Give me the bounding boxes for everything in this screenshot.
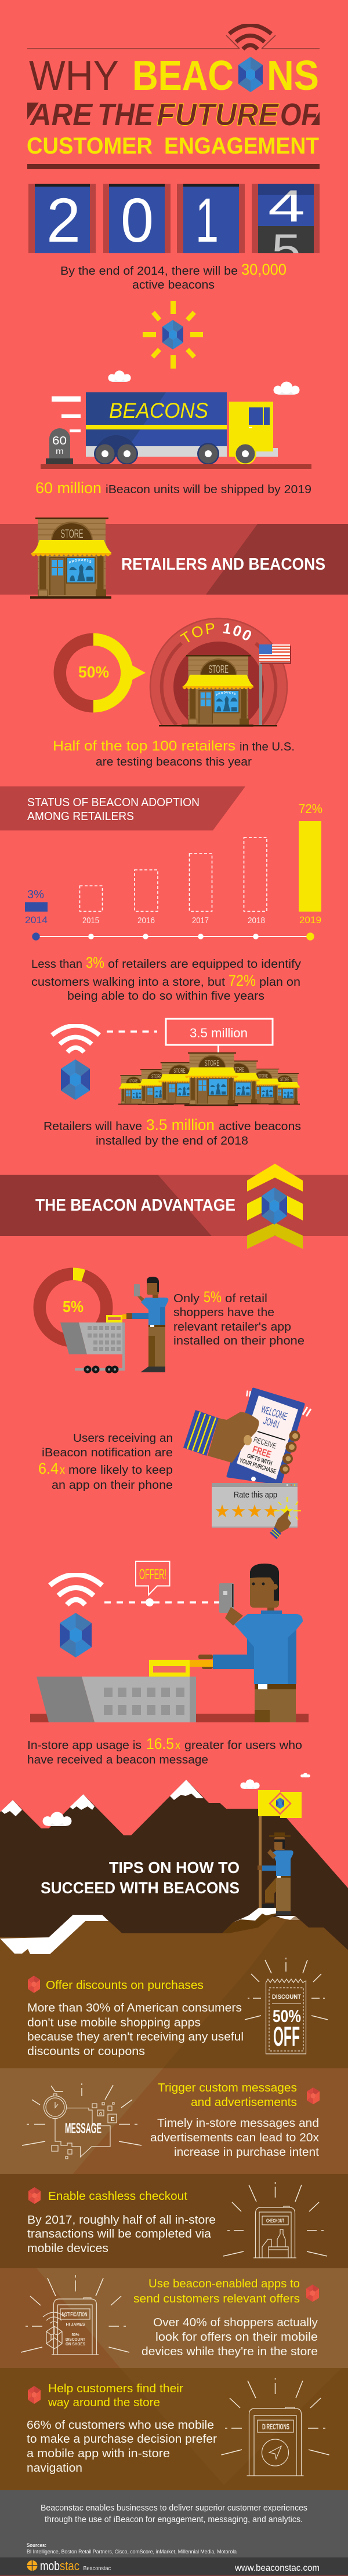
footer: about beaconstac and sources [0,2490,348,2557]
text: 30,000 active beacons: By the end of 2014, there will be [60,265,238,278]
bar: 2019: 72% [299,801,322,816]
text: only 5% of retail shoppers: relevant retailer's app [173,1321,291,1333]
panel: tip 2 messages [0,2068,348,2174]
text: about beaconstac [41,2503,307,2524]
icon: american flag [259,644,291,725]
callout: 3.5 million: 3.5 million [190,1026,248,1040]
panel: status of beacon adoption heading: STATUS OF BEACON ADOPTION [27,796,200,809]
logo: mobstac: stac [60,2559,79,2573]
panel: tip 1 discounts [27,1958,328,2058]
text: less than 3%: being able to do so within five years [67,990,264,1003]
text: less than 3%: customers walking into a store, but [31,976,225,989]
text: tip 5 body: a mobile app with in-store [27,2447,170,2460]
text: less than 3%: of retailers are equipped to identify [108,958,301,971]
title line: why beacons [29,53,319,99]
text: half of the top 100 retailers: are testing beacons this year [96,756,252,768]
icon: group of stores [118,1052,300,1106]
text: tip 4 body: devices while they're in the store [142,2345,318,2358]
text: sources: Sources: [27,2542,46,2549]
icon: cart [30,1660,309,1722]
heading: trigger custom messages [158,2082,297,2109]
text: half of the top 100 retailers: in the U.S. [240,741,295,753]
text: 60 million shipped [35,479,311,497]
year flip counter 2014: 0 [121,185,154,255]
title line: are the future of: FUTURE [157,97,280,132]
illustration: mountains with flag and climber [0,1773,348,2068]
chart: 50% donut [60,639,146,706]
panel: retailers and beacons banner [0,518,348,599]
text: 3.5 million active beacons: 3.5 million [146,1116,215,1134]
text: less than 3%: 72% [229,972,256,989]
panel: rate this app [212,1483,301,1539]
icon: phone notification: NOTIFICATION [61,2312,87,2318]
panel: rate this app: Rate this app [234,1490,277,1500]
text: users receiving an ibeacon notification: iBeacon notification are [42,1447,173,1459]
icon: phone directions [222,2378,329,2476]
title line: why beacons: WHY [29,53,119,99]
icon: phone checkout [223,2182,327,2258]
heading: help customers find their way: Help customers find their [48,2382,183,2395]
title line: customer engagement: CUSTOMER [27,133,153,159]
icon: message bubble and stopwatch: E [111,2116,115,2123]
timeline [32,932,314,941]
illustration: phone with welcome message: JOHN [262,1415,281,1431]
heading: retailers and beacons: RETAILERS AND BEACONS [121,555,325,574]
icon: red beacon [307,2087,320,2104]
text: less than 3%: Less than [31,958,82,971]
bar chart: beacon adoption by year: 2015 [82,916,99,926]
icon: 60 m milestone: 60 [52,435,67,447]
illustration: beacon delivery truck: BEACONS [109,399,208,422]
title line: are the future of: OF [280,97,319,132]
icon: red beacon [28,1976,40,1993]
icon: discount coupon [245,1958,328,2054]
icon: store [182,655,253,727]
icon: rating stars [216,1497,301,1520]
icon: snow caps [1,1780,204,1816]
text: in-store app usage: In-store app usage is [27,1739,142,1752]
icon: 60 m milestone [46,428,73,464]
bar: 2019: 2019 [299,914,321,926]
callout: 3.5 million [166,1019,273,1053]
icon: chevrons with beacon [247,1164,303,1249]
icon: store: PRODUCTS [68,559,92,564]
illustration: beacon delivery truck [41,370,311,469]
icon: shopping cart [60,1314,132,1373]
text: about beaconstac: Beaconstac enables businesses to deliver superior customer experiences [41,2503,307,2513]
text: 30,000 active beacons: active beacons [132,279,215,292]
text: sources: BI Intelligence, Boston Retail Partners, Cisco, comScore, inMarket, Millennial Media, Motorola [27,2549,237,2555]
text: website: www.beaconstac.com [234,2563,320,2573]
year flip counter 2014: 2 [46,185,81,255]
text: 60 million shipped: 60 million [35,479,102,497]
icon: title wifi signal [27,25,320,49]
icon: phone notification: HI JAMES [66,2322,85,2327]
icon: group of stores: STORE [151,1073,161,1079]
text: tip 2 body: increase in purchase intent [174,2146,319,2159]
text: only 5% of retail shoppers: of retail [225,1292,267,1305]
text: 3.5 million active beacons: installed by the end of 2018 [96,1135,248,1147]
text: tip 1 body: don't use mobile shopping apps [27,2017,201,2030]
text: tip 3 body: transactions will be completed via [27,2228,212,2240]
heading: help customers find their way [48,2382,183,2409]
bar: 2014: 2014 [25,914,48,926]
title line: are the future of [27,97,320,132]
callout: offer: OFFER! [139,1566,166,1583]
text: in-store app usage: have received a beacon message [27,1754,208,1766]
icon: phone notification: 50% [72,2332,79,2337]
text: tip 2 body: advertisements can lead to 20x [150,2132,319,2144]
icon: red beacon [306,2284,319,2302]
title line: why beacons: BEAC [132,53,234,99]
heading: trigger custom messages: and advertisements [191,2096,297,2109]
icon: message bubble and stopwatch [22,2083,142,2159]
icon: group of stores: STORE [258,1073,268,1079]
text: less than 3% [31,954,301,1003]
text: tip 2 body: Timely in-store messages and [157,2117,319,2130]
text: less than 3%: 3% [86,954,104,971]
icon: group of stores: STORE [280,1077,289,1083]
panel: tip 5 store navigation [0,2368,348,2490]
text: tip 3 body: mobile devices [27,2242,108,2255]
bar chart: beacon adoption by year: 2016 [137,916,155,926]
year flip counter 2014 [28,184,320,253]
heading: trigger custom messages: Trigger custom messages [158,2082,297,2094]
heading: use beacon-enabled apps: send customers relevant offers [133,2293,300,2305]
illustration: phone with welcome message: RECEIVE [253,1435,277,1451]
text: tip 4 body: look for offers on their mobile [155,2331,318,2344]
panel: status of beacon adoption heading [0,786,245,830]
footer: logo bar [0,2557,348,2576]
icon: red beacon [28,2386,41,2404]
icon: man with phone [126,1277,168,1372]
icon: red beacon [28,2187,41,2204]
illustration: beacon sends offer to shopper [30,1561,309,1722]
title line: customer engagement [27,133,319,159]
title line: why beacons: NS [267,53,319,99]
bar chart: beacon adoption by year: 2017 [192,916,209,926]
text: 60 million shipped: iBeacon units will be shipped by 2019 [106,483,311,496]
year flip counter 2014: 5 [271,224,301,275]
text: tip 1 body [27,2002,244,2058]
heading: tips on how to succeed with beacons: TIPS ON HOW TO [109,1859,240,1877]
text: only 5% of retail shoppers [173,1288,304,1347]
text: tip 1 body: More than 30% of American consumers [27,2002,242,2014]
logo: mobstac [27,2559,111,2573]
text: sources [27,2542,237,2555]
heading: tips on how to succeed with beacons [41,1859,240,1897]
text: tip 1 body: discounts or coupons [27,2045,145,2058]
text: users receiving an ibeacon notification: an app on their phone [52,1479,173,1492]
icon: store: STORE [208,663,229,675]
text: tip 1 body: because they aren't receiving any useful [27,2031,244,2043]
icon: group of stores: STORE [129,1079,137,1084]
text: in-store app usage: x [175,1739,180,1752]
text: in-store app usage: greater for users who [184,1739,302,1752]
bar chart: beacon adoption by year: 2018 [248,916,265,926]
icon: discount coupon: 50% [273,2007,301,2026]
heading: enable cashless checkout: Enable cashless checkout [48,2190,187,2203]
title line: why beacons: O [244,67,258,92]
text: in-store app usage [27,1735,302,1766]
heading: tips on how to succeed with beacons: SUCCEED WITH BEACONS [41,1879,240,1897]
icon: clouds [43,1773,310,1826]
heading: offer discounts: Offer discounts on purchases [46,1979,204,1992]
icon: clouds [108,370,299,395]
text: about beaconstac: through the use of iBeacon for engagement, messaging, and analytics. [45,2515,303,2524]
icon: phone notification [21,2275,129,2355]
panel: tip 4 beacon-enabled apps [0,2268,348,2368]
bar: 2019 [299,801,322,926]
icon: phone checkout: CHECKOUT [266,2218,284,2224]
icon: flag with beacon [258,1790,302,1908]
panel: tip 3 cashless checkout [0,2174,348,2268]
title line: are the future of: ARE [29,97,93,132]
text: only 5% of retail shoppers: shoppers have the [173,1306,274,1319]
text: half of the top 100 retailers: Half of the top 100 retailers [53,738,235,754]
callout: offer [136,1561,169,1595]
heading: help customers find their way: way around the store [48,2396,160,2409]
text: top 100 on arch: TOP 100 [180,623,252,642]
bar chart: beacon adoption by year [25,801,322,941]
text: only 5% of retail shoppers: Only [173,1292,200,1305]
panel: the beacon advantage banner [0,1164,348,1249]
icon: phone directions: DIRECTIONS [262,2422,289,2431]
icon: group of stores: STORE [205,1058,219,1067]
text: users receiving an ibeacon notification: more likely to keep [68,1464,173,1477]
illustration: phone with welcome message: YOUR PURCHASE [238,1457,277,1475]
icon: pointing hand [270,1510,291,1539]
text: tip 4 body [142,2316,318,2358]
illustration: phone with welcome message: GIFTS WITH [246,1452,273,1467]
icon: message bubble and stopwatch: G [99,2112,103,2116]
text: tip 3 body [27,2214,216,2255]
icon: hand and striped sleeve [183,1410,300,1474]
text: tip 5 body: 66% of customers who use mobile [27,2419,214,2432]
text: tip 4 body: Over 40% of shoppers actually [153,2316,318,2329]
text: 3.5 million active beacons: active beacons [219,1120,301,1133]
text: tip 5 body: navigation [27,2462,82,2475]
text: less than 3%: plan on [259,976,300,989]
icon: group of stores: STORE [173,1067,186,1074]
heading: use beacon-enabled apps: Use beacon-enabled apps to [148,2278,300,2290]
illustration: top 100 store arch [150,618,291,727]
icon: discount coupon: OFF [273,2021,300,2052]
text: users receiving an ibeacon notification: x [60,1464,65,1477]
bar: 2014: 3% [27,888,44,901]
year flip counter 2014: 4 [268,180,305,231]
header: title block [27,25,320,169]
text: users receiving an ibeacon notification: Users receiving an [73,1432,173,1445]
icon: shining beacon [143,301,203,369]
icon: store [30,518,111,599]
panel: status of beacon adoption heading: AMONG RETAILERS [27,810,134,823]
heading: the beacon advantage: THE BEACON ADVANTAGE [35,1196,235,1215]
text: only 5% of retail shoppers: 5% [204,1288,222,1306]
illustration: 3.5 million beacons and stores [52,1019,300,1106]
icon: group of stores: STORE [232,1066,245,1073]
icon: phone notification: DISCOUNT [66,2337,85,2342]
text: 3.5 million active beacons [44,1116,301,1147]
icon: climber [258,1832,293,1915]
heading: use beacon-enabled apps [133,2278,300,2305]
text: users receiving an ibeacon notification: 6.4 [38,1460,59,1477]
chart: 5% donut with shopper: 5% [63,1298,84,1316]
bar: 2014 [25,888,48,926]
text: 30,000 active beacons [60,261,287,292]
icon: discount coupon: DISCOUNT [272,1994,301,2001]
icon: store: STORE [60,527,84,541]
text: tip 2 body [150,2117,319,2159]
icon: message bubble and stopwatch: MESSAGE [65,2120,102,2137]
text: only 5% of retail shoppers: installed on their phone [173,1335,304,1347]
text: half of the top 100 retailers [53,738,295,768]
illustration: phone with welcome message: WELCOME [260,1403,289,1423]
text: tip 5 body: to make a purchase decision prefer [27,2433,217,2446]
text: tip 5 body [27,2419,217,2475]
text: users receiving an ibeacon notification [38,1432,173,1492]
text: in-store app usage: 16.5 [146,1735,174,1752]
icon: shopper with phone [190,1564,303,1722]
icon: 60 m milestone: m [56,446,64,456]
title line: customer engagement: ENGAGEMENT [164,133,319,159]
text: tip 3 body: By 2017, roughly half of all in-store [27,2214,216,2227]
logo: mobstac: Beaconstac [84,2566,111,2572]
year flip counter 2014: 1 [195,185,219,255]
chart: 5% donut with shopper [39,1274,168,1373]
text: 3.5 million active beacons: Retailers will have [44,1120,142,1133]
icon: phone notification: ON SHOES [66,2341,85,2347]
illustration: phone with welcome message: FREE [251,1444,273,1460]
logo: mobstac: mob [40,2559,60,2573]
icon: store: PRODUCTS [216,691,235,696]
chart: 50% donut: 50% [78,663,109,681]
illustration: phone with welcome message [183,1389,311,1484]
text: 30,000 active beacons: 30,000 [241,261,287,278]
title line: are the future of: THE [97,97,154,132]
